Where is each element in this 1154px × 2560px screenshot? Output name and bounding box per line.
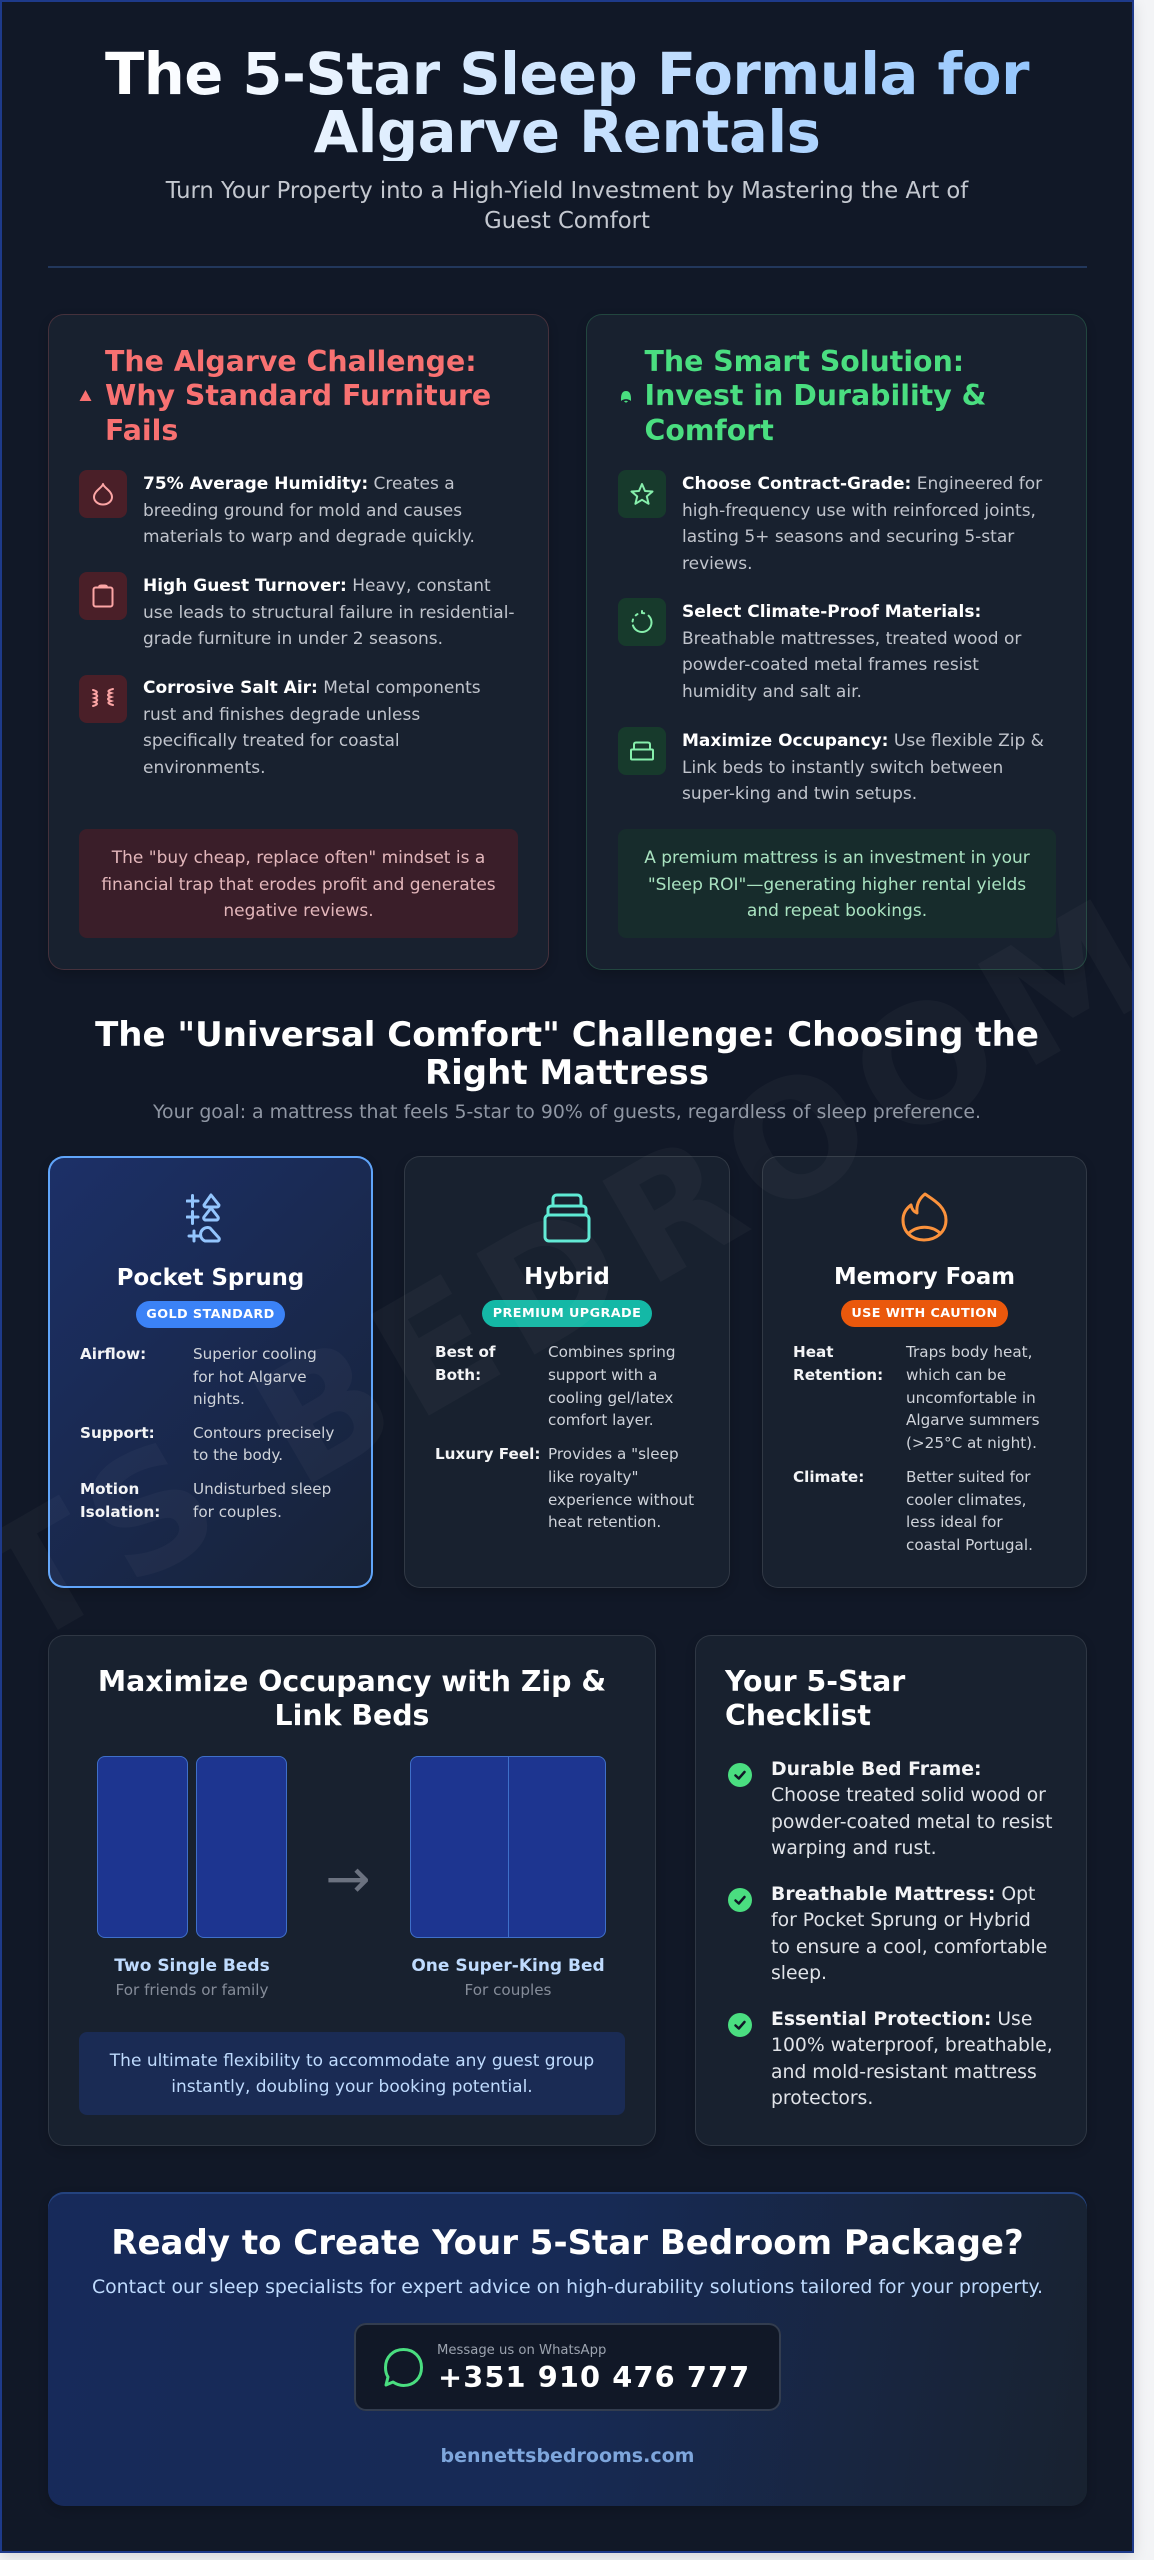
text: humidity [143, 474, 475, 547]
icon: water drop [79, 470, 127, 518]
text: climate proof: Breathable mattresses, treated wood or [682, 629, 1021, 649]
badge: use with caution: USE WITH CAUTION [851, 1306, 998, 1321]
callout: flexibility: instantly, doubling your booking potential. [171, 2077, 533, 2097]
panel: the Algarve challenge [48, 314, 549, 970]
text: occupancy: super-king and twin setups. [682, 784, 917, 804]
text: climate proof: powder-coated metal frames resist [682, 655, 979, 675]
value: airflow: nights. [193, 1390, 245, 1408]
icon: check one [728, 1763, 752, 1787]
section heading: mattress: The "Universal Comfort" Challenge: Choosing the [95, 1015, 1039, 1055]
callout: financial trap [79, 829, 518, 938]
text: contract grade: lasting 5+ seasons and securing 5-star [682, 527, 1014, 547]
label: best of both: Both: [435, 1366, 481, 1384]
panel: zip and link beds [48, 1635, 656, 2146]
arrow: → [325, 1847, 371, 1910]
callout: financial trap: negative reviews. [223, 901, 374, 921]
text: breathable mattress [771, 1884, 1047, 1984]
value: climate: less ideal for [906, 1513, 1003, 1531]
text: contract grade: Choose Contract-Grade: Engineered for [682, 474, 1042, 494]
card: memory foam [762, 1156, 1087, 1588]
label: motion isolation [80, 1480, 160, 1521]
value: airflow [193, 1345, 317, 1408]
value: motion isolation: Undisturbed sleep [193, 1480, 331, 1498]
section heading: mattress: Right Mattress [425, 1053, 709, 1093]
header [105, 41, 1030, 234]
icon: star [618, 470, 666, 518]
heading: solution: Invest in Durability & [644, 379, 986, 412]
value: airflow: Superior cooling [193, 1345, 317, 1363]
text: turnover: use leads to structural failure in residential- [143, 603, 515, 623]
note: couples: For couples [465, 1981, 551, 1999]
value: best of both [548, 1343, 676, 1429]
value: best of both: comfort layer. [548, 1411, 654, 1429]
subtitle: call to action: Contact our sleep specialists for expert advice on high-durability solutions tailored for your property. [92, 2276, 1043, 2298]
heading: challenge: The Algarve Challenge: [105, 345, 477, 378]
value: luxury feel [548, 1445, 694, 1531]
label: best of both [435, 1343, 496, 1384]
text: whatsapp label: Message us on WhatsApp [437, 2343, 606, 2358]
heading: zip and link: Link Beds [275, 1699, 429, 1732]
icon: dashed circle [618, 598, 666, 646]
callout: flexibility: The ultimate flexibility to accommodate any guest group [110, 2051, 594, 2071]
link: website: bennettsbedrooms.com [441, 2445, 694, 2467]
icon: check two [728, 1888, 752, 1912]
icon: springs [186, 1193, 221, 1242]
text: turnover: High Guest Turnover: Heavy, constant [143, 576, 491, 596]
text: bed frame: Choose treated solid wood or [771, 1785, 1046, 1806]
value: climate: coastal Portugal. [906, 1536, 1033, 1554]
label: two single beds: Two Single Beds [114, 1956, 270, 1976]
title: memory foam: Memory Foam [834, 1264, 1015, 1290]
text: contract grade [682, 474, 1042, 574]
panel: checklist [695, 1635, 1087, 2146]
value: best of both: cooling gel/latex [548, 1389, 673, 1407]
heading: challenge: Why Standard Furniture [105, 379, 491, 412]
icon: salt air [79, 675, 127, 723]
subtitle [166, 178, 969, 234]
icon: bell [621, 391, 631, 403]
icon: clipboard [79, 572, 127, 620]
text: climate proof: humidity and salt air. [682, 682, 862, 702]
heading: solution: The Smart Solution: [644, 345, 964, 378]
value: motion isolation [193, 1480, 331, 1521]
card: hybrid [404, 1156, 730, 1588]
label: heat retention: Retention: [793, 1366, 883, 1384]
label: climate: Climate: [793, 1468, 864, 1486]
text: climate proof [682, 602, 1022, 702]
value: motion isolation: for couples. [193, 1503, 282, 1521]
text: occupancy: Maximize Occupancy: Use flexible Zip & [682, 731, 1044, 751]
value: luxury feel: experience without [548, 1491, 694, 1509]
callout: financial trap: financial trap that erodes profit and generates [101, 875, 496, 895]
text: protection: Essential Protection: Use [771, 2009, 1032, 2030]
icon: flame [902, 1192, 948, 1242]
label: heat retention: Heat [793, 1343, 834, 1361]
label: heat retention [793, 1343, 883, 1384]
value: support: Contours precisely [193, 1424, 334, 1442]
callout: sleep ROI: "Sleep ROI"—generating higher rental yields [648, 875, 1026, 895]
value: climate [906, 1468, 1033, 1554]
text: humidity: breeding ground for mold and causes [143, 501, 462, 521]
heading: zip and link [98, 1665, 606, 1732]
value: heat retention: which can be [906, 1366, 1006, 1384]
heading: challenge: Fails [105, 414, 178, 447]
value: best of both: Combines spring [548, 1343, 676, 1361]
bed: single two [196, 1756, 287, 1938]
text: occupancy [682, 731, 1044, 804]
badge: gold standard: GOLD STANDARD [146, 1307, 275, 1322]
badge: premium upgrade: PREMIUM UPGRADE [493, 1306, 641, 1321]
value: heat retention: (>25°C at night). [906, 1434, 1037, 1452]
bed: super king [410, 1756, 606, 1938]
value: climate: Better suited for [906, 1468, 1030, 1486]
heading: call to action: Ready to Create Your 5-Star Bedroom Package? [111, 2223, 1024, 2263]
heading: solution: Comfort [644, 414, 774, 447]
title: hybrid: Hybrid [524, 1264, 610, 1290]
badge: premium upgrade [482, 1300, 652, 1327]
value: best of both: support with a [548, 1366, 658, 1384]
text: breathable mattress: sleep. [771, 1963, 827, 1984]
card: pocket sprung [48, 1156, 373, 1588]
text: breathable mattress: for Pocket Sprung or Hybrid [771, 1910, 1031, 1931]
title [0, 46, 1134, 161]
text: turnover: grade furniture in under 2 seasons. [143, 629, 443, 649]
icon: bed [618, 727, 666, 775]
subtitle: Guest Comfort [484, 208, 650, 234]
value: climate: cooler climates, [906, 1491, 1026, 1509]
value: heat retention: uncomfortable in [906, 1389, 1036, 1407]
subtitle: Turn Your Property into a High-Yield Investment by Mastering the Art of [166, 178, 968, 204]
text: salt air [143, 678, 481, 778]
text: salt air: rust and finishes degrade unless [143, 705, 420, 725]
text: protection: protectors. [771, 2088, 873, 2109]
panel: call to action [48, 2192, 1087, 2506]
icon: whatsapp [384, 2348, 423, 2387]
text: salt air: environments. [143, 758, 266, 778]
text: protection: and mold-resistant mattress [771, 2062, 1037, 2083]
text: bed frame [771, 1759, 1052, 1859]
title: The 5-Star Sleep Formula for [105, 41, 1029, 108]
value: support [193, 1424, 334, 1464]
section heading: mattress [95, 1015, 1039, 1093]
callout: sleep ROI: A premium mattress is an investment in your [644, 848, 1030, 868]
value: heat retention [906, 1343, 1040, 1452]
text: humidity: materials to warp and degrade quickly. [143, 527, 475, 547]
note: friends or family: For friends or family [116, 1981, 268, 1999]
label: airflow: Airflow: [80, 1345, 146, 1363]
text: bed frame: warping and rust. [771, 1838, 937, 1859]
value: heat retention: Traps body heat, [906, 1343, 1032, 1361]
heading: solution [644, 345, 986, 447]
heading: checklist [724, 1665, 906, 1732]
text: bed frame: Durable Bed Frame: [771, 1759, 981, 1780]
bed: single one [97, 1756, 188, 1938]
heading: challenge [105, 345, 491, 447]
label: one super king bed: One Super-King Bed [411, 1956, 605, 1976]
title: Algarve Rentals [314, 99, 820, 166]
callout: sleep ROI: and repeat bookings. [747, 901, 927, 921]
label: support: Support: [80, 1424, 155, 1442]
badge: gold standard [136, 1301, 285, 1328]
text: breathable mattress: Breathable Mattress: Opt [771, 1884, 1035, 1905]
value: airflow: for hot Algarve [193, 1368, 307, 1386]
panel: the smart solution [586, 314, 1087, 970]
label: best of both: Best of [435, 1343, 496, 1361]
text: bed frame: powder-coated metal to resist [771, 1812, 1052, 1833]
callout: sleep ROI [618, 829, 1056, 938]
callout: financial trap: The "buy cheap, replace often" mindset is a [112, 848, 485, 868]
value: heat retention: Algarve summers [906, 1411, 1040, 1429]
value: support: to the body. [193, 1446, 283, 1464]
badge: use with caution [841, 1300, 1008, 1327]
value: luxury feel: heat retention. [548, 1513, 661, 1531]
value: luxury feel: like royalty" [548, 1468, 639, 1486]
icon: layers [544, 1194, 590, 1242]
text: occupancy: Link beds to instantly switch between [682, 758, 1003, 778]
contact box [354, 2323, 781, 2411]
icon: warning triangle [80, 390, 92, 401]
text: contract grade: reviews. [682, 554, 752, 574]
text: breathable mattress: to ensure a cool, comfortable [771, 1937, 1047, 1958]
heading: zip and link: Maximize Occupancy with Zip & [98, 1665, 606, 1698]
text: protection [771, 2009, 1053, 2109]
text: salt air: specifically treated for coastal [143, 731, 400, 751]
text: turnover [143, 576, 515, 649]
label: luxury feel: Luxury Feel: [435, 1445, 540, 1463]
heading: checklist: Checklist [725, 1699, 871, 1732]
text: contract grade: high-frequency use with reinforced joints, [682, 501, 1036, 521]
callout: flexibility [79, 2032, 625, 2115]
value: luxury feel: Provides a "sleep [548, 1445, 679, 1463]
text: salt air: Corrosive Salt Air: Metal components [143, 678, 481, 698]
title: pocket sprung: Pocket Sprung [117, 1265, 304, 1291]
label: motion isolation: Isolation: [80, 1503, 160, 1521]
text: climate proof: Select Climate-Proof Materials: [682, 602, 981, 622]
icon: check three [728, 2013, 752, 2037]
text: protection: 100% waterproof, breathable, [771, 2035, 1053, 2056]
section subtitle: Your goal: a mattress that feels 5-star to 90% of guests, regardless of sleep preference. [153, 1101, 981, 1123]
label: motion isolation: Motion [80, 1480, 139, 1498]
text: humidity: 75% Average Humidity: Creates a [143, 474, 455, 494]
heading: checklist: Your 5-Star [725, 1665, 905, 1698]
text: phone number: +351 910 476 777 [438, 2360, 750, 2394]
